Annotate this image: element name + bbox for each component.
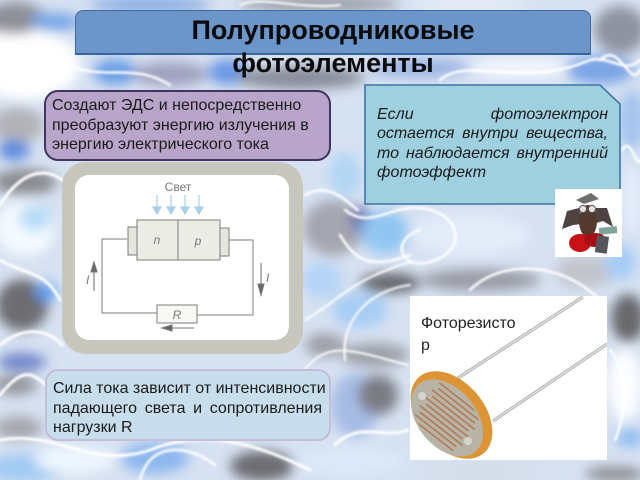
photoresistor body <box>410 371 492 459</box>
semiconductor block <box>128 220 229 260</box>
panel: current dependence: нагрузки R <box>53 419 133 436</box>
panel: EMF definition: преобразуют энергию излучения в <box>52 116 309 134</box>
photoresistor label: Фоторезисто <box>421 315 516 332</box>
photoresistor label: р <box>421 337 430 354</box>
diagram labels: I <box>266 271 270 285</box>
callout text: фотоэффект <box>377 164 486 181</box>
title panel <box>75 10 591 55</box>
panel: internal photoeffect callout <box>364 84 621 205</box>
panel: EMF definition: Создают ЭДС и непосредственно <box>52 97 301 114</box>
photoresistor label <box>421 315 516 354</box>
diagram labels: R <box>173 308 182 322</box>
circuit wires <box>102 239 253 315</box>
panel: photoresistor photo <box>410 296 607 460</box>
callout text: остается внутри вещества, <box>377 125 608 142</box>
title <box>191 15 475 78</box>
panel: photocell circuit diagram <box>62 162 303 354</box>
panel: EMF definition <box>44 90 331 161</box>
lead wires <box>458 297 607 421</box>
diagram labels: p <box>194 234 202 248</box>
current arrows <box>91 262 264 331</box>
callout text: то наблюдается внутренний <box>377 145 608 162</box>
panel: current dependence <box>45 369 331 441</box>
title: фотоэлементы <box>232 48 434 78</box>
panel: EMF definition: энергию электрического тока <box>52 136 269 153</box>
icon: owl with books <box>555 189 622 257</box>
diagram labels <box>86 180 270 322</box>
diagram labels: n <box>154 233 161 247</box>
callout text: Если фотоэлектрон <box>377 106 608 123</box>
panel: current dependence: падающего света и сопротивления <box>53 400 322 416</box>
title: Полупроводниковые <box>191 15 475 45</box>
panel: current dependence: Сила тока зависит от интенсивности <box>53 380 326 397</box>
resistor <box>157 305 197 323</box>
callout text <box>377 106 608 181</box>
light arrows <box>153 195 203 214</box>
diagram labels: Свет <box>165 180 192 194</box>
diagram labels: I <box>86 273 90 287</box>
